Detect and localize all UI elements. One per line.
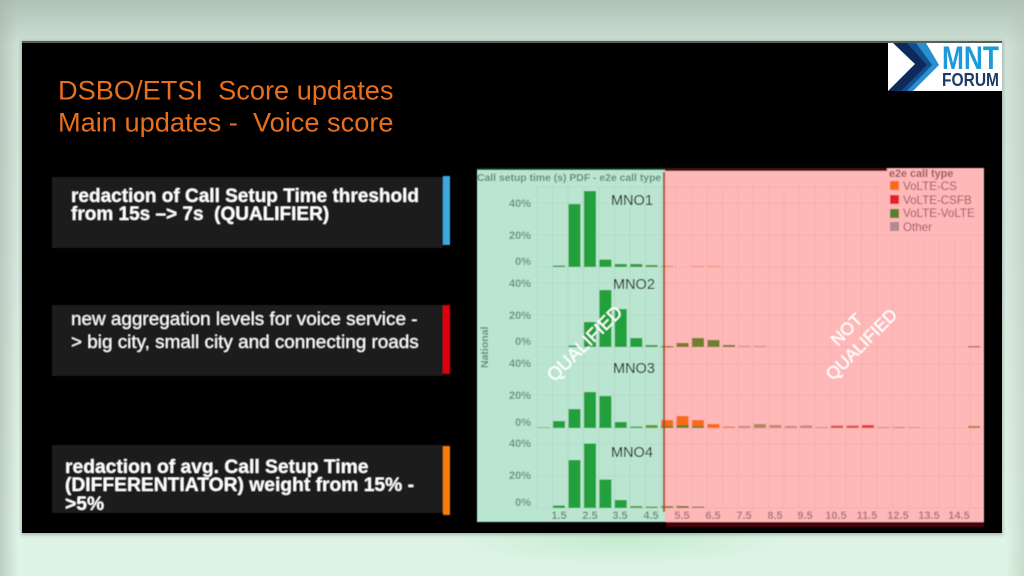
y axis labels: 0% bbox=[515, 256, 531, 268]
logo: MNT Forum bbox=[888, 40, 1002, 91]
y axis labels: 40% bbox=[509, 358, 531, 370]
logo: MNT Forum: FORUM bbox=[942, 70, 999, 90]
not qualified zone bbox=[665, 170, 984, 522]
panel: call setup threshold bbox=[52, 176, 450, 248]
text: threshold: from 15s –> 7s (QUALIFIER) bbox=[71, 204, 329, 225]
national axis label: National bbox=[479, 326, 491, 368]
y axis labels: 40% bbox=[509, 198, 531, 210]
threshold line bbox=[663, 172, 665, 512]
bars: MNO4 bbox=[553, 444, 704, 508]
x axis labels: 3.5 bbox=[612, 510, 628, 522]
MNO labels: MNO2 bbox=[613, 277, 655, 293]
title: Main updates - Voice score bbox=[58, 106, 394, 138]
y axis labels: 0% bbox=[515, 417, 531, 429]
x axis labels: 2.5 bbox=[582, 510, 598, 522]
not qualified label: QUALIFIED bbox=[822, 305, 901, 384]
panel: avg call setup weight bbox=[52, 445, 450, 515]
MNO labels: MNO1 bbox=[611, 193, 653, 209]
text: aggregation: new aggregation levels for voice service - bbox=[71, 309, 418, 330]
y axis labels: 0% bbox=[515, 497, 531, 509]
grid bbox=[534, 187, 665, 509]
chart: call setup time PDF bbox=[477, 168, 984, 527]
x axis labels: 11.5 bbox=[857, 510, 877, 522]
y axis labels: 20% bbox=[509, 310, 531, 322]
MNO labels: MNO4 bbox=[611, 445, 653, 461]
y axis labels: 20% bbox=[509, 230, 531, 242]
bars: MNO3 bbox=[538, 392, 980, 428]
accent bar: red bbox=[443, 305, 450, 374]
not qualified label: NOT bbox=[826, 309, 867, 350]
accent bar: orange bbox=[443, 446, 450, 515]
x axis labels bbox=[551, 510, 970, 522]
logo: MNT Forum: MNT bbox=[942, 40, 999, 76]
chart title: Call setup time (s) PDF - e2e call type bbox=[477, 173, 661, 184]
y axis labels: 40% bbox=[509, 438, 531, 450]
legend bbox=[887, 168, 984, 234]
title: DSBO/ETSI Score updates bbox=[58, 74, 393, 106]
x axis labels: 9.5 bbox=[797, 510, 813, 522]
y axis labels: 40% bbox=[509, 278, 531, 290]
x axis labels: 5.5 bbox=[674, 510, 690, 522]
legend: e2e call type bbox=[889, 168, 953, 180]
MNO labels: MNO3 bbox=[613, 361, 655, 377]
text: weight: redaction of avg. Call Setup Time bbox=[65, 457, 369, 478]
legend: VoLTE-CS bbox=[903, 180, 957, 193]
x axis labels: 10.5 bbox=[825, 510, 847, 522]
text: weight: (DIFFERENTIATOR) weight from 15% - bbox=[65, 475, 414, 496]
accent bar: blue bbox=[443, 176, 450, 245]
y axis labels bbox=[509, 198, 531, 509]
MNO labels bbox=[611, 193, 655, 461]
legend: VoLTE-CSFB bbox=[903, 194, 972, 207]
y axis labels: 20% bbox=[509, 390, 531, 402]
y axis labels: 20% bbox=[509, 470, 531, 482]
legend: Other bbox=[903, 221, 932, 234]
bars: MNO2 bbox=[568, 290, 980, 348]
x axis labels: 7.5 bbox=[736, 510, 752, 522]
title bbox=[58, 74, 394, 138]
panel: aggregation levels bbox=[52, 305, 450, 376]
x axis labels: 4.5 bbox=[643, 510, 659, 522]
qualified zone bbox=[477, 170, 665, 522]
x axis labels: 1.5 bbox=[551, 510, 567, 522]
text: aggregation: > big city, small city and connecting roads bbox=[71, 332, 419, 353]
x axis labels: 13.5 bbox=[918, 510, 940, 522]
x axis labels: 14.5 bbox=[948, 510, 970, 522]
qualified label: QUALIFIED bbox=[542, 301, 626, 385]
y axis labels: 0% bbox=[515, 336, 531, 348]
text: threshold: redaction of Call Setup Time threshold bbox=[71, 186, 419, 207]
legend: VoLTE-VoLTE bbox=[903, 207, 975, 220]
x axis labels: 12.5 bbox=[887, 510, 909, 522]
x axis labels: 6.5 bbox=[705, 510, 721, 522]
x axis labels: 8.5 bbox=[767, 510, 783, 522]
bars: MNO1 bbox=[553, 191, 720, 267]
text: weight: >5% bbox=[65, 494, 104, 515]
